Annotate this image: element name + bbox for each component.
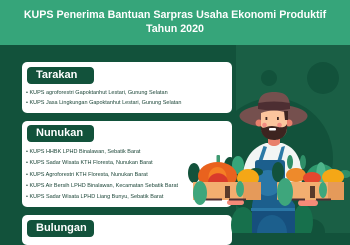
panel: Bulungan xyxy=(22,215,232,245)
crate: watermelon, carrots and fruit xyxy=(272,155,350,206)
crate: pumpkin and tomato xyxy=(188,155,263,205)
heading: Bulungan xyxy=(27,220,94,237)
list item 2: • KUPS Sadar Wisata KTH Floresta, Nunukan Barat xyxy=(26,160,153,166)
panel: Nunukan xyxy=(22,121,232,207)
heading: Nunukan xyxy=(27,125,94,142)
list item 2: • KUPS Jasa Lingkungan Gapoktanhut Lestari, Gunung Selatan xyxy=(26,100,181,106)
panel: Tarakan xyxy=(22,62,232,113)
list item 1: • KUPS HHBK LPHD Binalawan, Sebatik Barat xyxy=(26,149,140,155)
list item 4: • KUPS Air Bersih LPHD Binalawan, Kecamatan Sebatik Barat xyxy=(26,183,178,189)
heading: Tarakan xyxy=(27,67,94,84)
heading: Nunukan: Nunukan xyxy=(36,127,83,139)
title xyxy=(24,9,326,34)
title: Tahun 2020 xyxy=(146,22,204,34)
title: KUPS Penerima Bantuan Sarpras Usaha Ekonomi Produktif xyxy=(24,9,326,21)
heading: Tarakan: Tarakan xyxy=(36,69,77,81)
header band xyxy=(0,0,350,45)
heading: Bulungan: Bulungan xyxy=(36,222,87,234)
list item 3: • KUPS Agroforestri KTH Floresta, Nunukan Barat xyxy=(26,172,148,178)
farmer body xyxy=(231,138,313,245)
list item 5: • KUPS Sadar Wisata LPHD Liang Bunyu, Sebatik Barat xyxy=(26,194,163,200)
farmer head with hat xyxy=(240,92,308,140)
list item 1: • KUPS agroforestri Gapoktanhut Lestari, Gunung Selatan xyxy=(26,90,168,96)
